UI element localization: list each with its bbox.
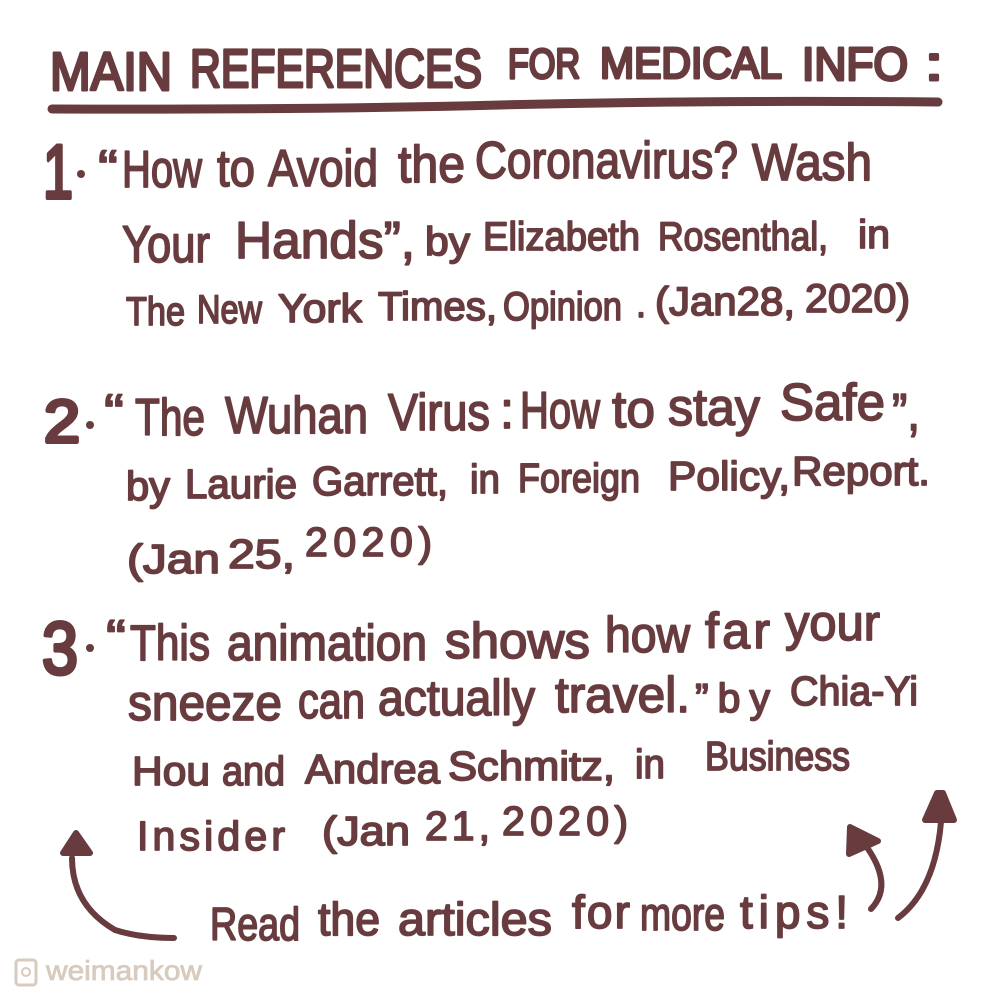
reference 3: actually [378, 670, 535, 726]
reference 3: your [785, 595, 880, 651]
reference 2: The [135, 389, 205, 447]
reference 2: ”, [892, 384, 920, 442]
reference 2: by [126, 463, 170, 509]
reference 3: can [298, 673, 365, 729]
reference 1: “ [98, 140, 118, 198]
title: FOR [508, 40, 580, 87]
reference 1: Your [122, 216, 210, 274]
call to action: more [640, 888, 725, 940]
reference 2: Report. [792, 448, 930, 494]
call to action: articles [398, 893, 552, 945]
reference 2: “ [104, 384, 124, 442]
reference 3: animation [227, 615, 427, 671]
reference 3: in [635, 741, 665, 787]
reference 3: shows [445, 613, 590, 669]
reference 1: Elizabeth [483, 215, 640, 259]
reference 1: in [858, 213, 890, 257]
call to action: the [318, 893, 380, 945]
reference 1: Times, [378, 285, 497, 329]
reference 2: stay [668, 379, 760, 437]
reference 2: to [612, 381, 655, 439]
reference 2: 2020) [305, 519, 432, 565]
reference 3: Hou [132, 748, 210, 794]
reference 1: (Jan28, [655, 280, 795, 324]
title [50, 38, 943, 109]
reference 3: how [605, 607, 691, 663]
reference 1: Opinion [503, 285, 622, 329]
reference 3: 2020) [502, 798, 628, 844]
reference 3: far [705, 603, 770, 659]
reference 2: in [470, 456, 500, 502]
reference 3: and [222, 748, 285, 794]
reference 1: Rosenthal, [658, 215, 828, 259]
credit: weimankow: weimankow [45, 955, 203, 986]
reference 2: Safe [780, 374, 885, 432]
reference 2: 25, [228, 531, 295, 577]
reference 3: (Jan [322, 808, 410, 854]
reference 1: New [197, 288, 262, 332]
title: : [925, 38, 943, 91]
reference 1 [43, 130, 910, 334]
reference 2: Wuhan [225, 387, 368, 445]
call to action: tips! [740, 886, 848, 938]
reference 1: Wash [752, 134, 872, 192]
reference 1: . [636, 282, 646, 326]
reference 3: “ [106, 610, 126, 666]
reference 2: How [520, 382, 600, 440]
reference 3: travel. [555, 667, 690, 723]
reference 3: sneeze [128, 675, 282, 731]
reference 1: to [217, 140, 255, 198]
reference 2 [44, 374, 930, 582]
reference 3: 21, [425, 803, 490, 849]
title: INFO [802, 38, 908, 90]
reference 3: ”by [695, 675, 770, 721]
reference 2: Laurie [185, 461, 297, 507]
reference 3: Andrea [305, 746, 440, 792]
reference 3: This [130, 615, 210, 671]
reference 1: Coronavirus? [475, 132, 738, 190]
call to action [210, 886, 848, 950]
title: MAIN [50, 42, 172, 102]
reference 1: the [398, 136, 465, 194]
reference 2: (Jan [127, 536, 220, 582]
reference 1: 1 [43, 130, 73, 215]
reference 3: Insider [137, 813, 285, 859]
arrow: left [63, 833, 174, 938]
reference 3: 3 [42, 607, 78, 690]
reference 1: How [122, 141, 202, 199]
reference 3 [42, 595, 918, 859]
reference 1: The [126, 290, 185, 334]
reference 2: 2 [44, 388, 80, 455]
reference 1: Avoid [268, 140, 378, 198]
title: MEDICAL [600, 39, 782, 88]
reference 1: Hands”, [235, 212, 415, 270]
reference 2: Policy, [668, 453, 790, 499]
reference 3: Business [705, 733, 850, 779]
title: REFERENCES [190, 39, 482, 99]
reference 1: 2020) [805, 277, 910, 321]
reference 2: Garrett, [312, 458, 448, 504]
arrow: right [898, 793, 954, 918]
call to action: Read [210, 898, 300, 950]
reference 3: Chia-Yi [790, 668, 918, 714]
reference 2: Foreign [518, 455, 640, 501]
arrow: middle [849, 827, 881, 909]
reference 2: Virus [388, 384, 490, 442]
reference 1: by [425, 220, 470, 264]
call to action: for [572, 886, 630, 938]
reference 3: Schmitz, [448, 743, 615, 789]
reference 2: : [500, 382, 514, 440]
reference 1: York [278, 287, 363, 331]
